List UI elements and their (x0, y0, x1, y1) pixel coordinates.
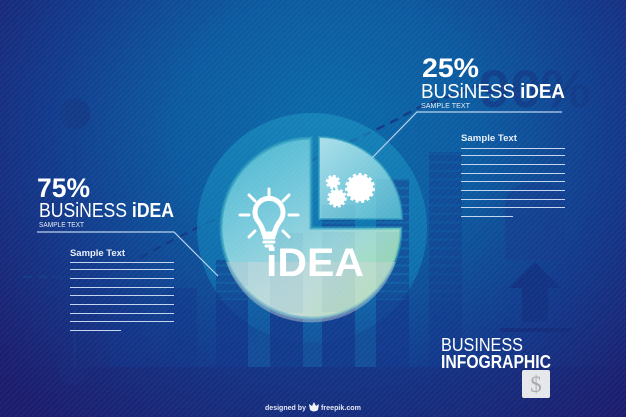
footer credit: freepik.com (321, 403, 361, 412)
heading: business infographic: INFOGRAPHIC (441, 352, 551, 372)
callout: 25% (372, 53, 565, 158)
ghost icon: figure and arrow (500, 183, 572, 332)
text block: right sample text (461, 133, 565, 216)
halo circle (197, 113, 427, 343)
pie title: iDEA: iDEA (266, 241, 364, 285)
callout: 75%: BUSiNESS iDEA (39, 200, 174, 222)
column glow between bars (248, 300, 376, 367)
text block: left sample text: Sample Text (70, 248, 125, 258)
pie: green tint (311, 228, 401, 318)
footer credit: designed by (265, 403, 307, 412)
pie: bottom shading (226, 262, 396, 322)
ghost text: 90%: 90% (479, 60, 591, 119)
icon: gears (328, 175, 373, 206)
text block: right sample text: Sample Text (461, 133, 517, 143)
heading: business infographic: BUSINESS (441, 335, 523, 355)
callout: 25%: BUSiNESS iDEA (421, 80, 565, 103)
background bar chart (110, 152, 462, 367)
callout: 75%: SAMPLE TEXT (39, 220, 84, 229)
callout: 75% (37, 173, 218, 276)
pie: three quarter segment (221, 138, 401, 318)
callout: 25%: SAMPLE TEXT (421, 101, 470, 110)
icon: dollar tile (522, 370, 550, 398)
icon: dollar tile: $ (530, 372, 542, 397)
icon: light bulb (240, 189, 298, 246)
pie chart (221, 137, 402, 322)
ghost decoration: pin and dashed trend line (23, 85, 480, 385)
footer credit (265, 402, 361, 412)
text block: left sample text (70, 248, 174, 330)
callout: 75%: 75% (37, 173, 90, 203)
heading: business infographic (441, 335, 551, 372)
pie: quarter segment (319, 137, 402, 219)
callout: 25%: 25% (422, 53, 479, 83)
bars seen through the pie (224, 179, 401, 313)
